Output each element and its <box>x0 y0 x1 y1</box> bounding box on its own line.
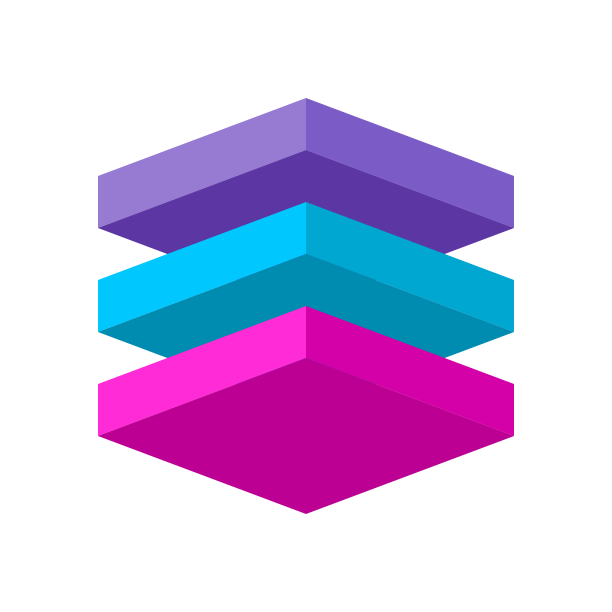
layer: cyan middle <box>98 202 514 410</box>
layer: purple top <box>98 98 514 306</box>
layer: magenta bottom <box>98 306 514 514</box>
